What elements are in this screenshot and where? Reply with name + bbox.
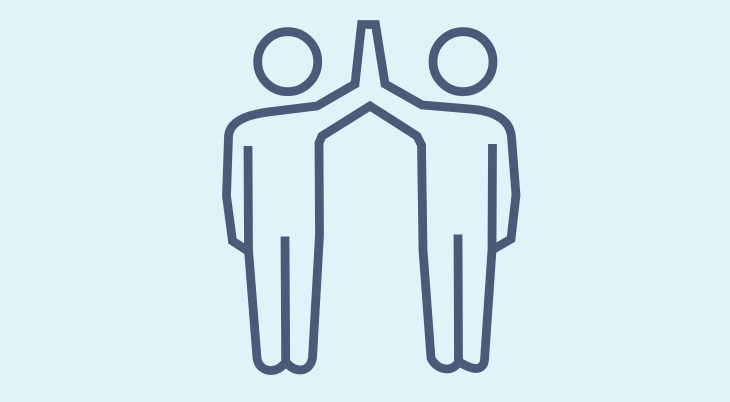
- right figure head: [433, 32, 493, 92]
- left figure centre leg line: [281, 236, 290, 362]
- inner outline of both raised arms, legs and feet: [248, 106, 492, 370]
- right figure centre leg line: [454, 234, 463, 362]
- outer outline of both figures with raised hands: [226, 24, 516, 251]
- icon: two figures giving a high five: [226, 24, 516, 370]
- left figure head: [258, 32, 318, 92]
